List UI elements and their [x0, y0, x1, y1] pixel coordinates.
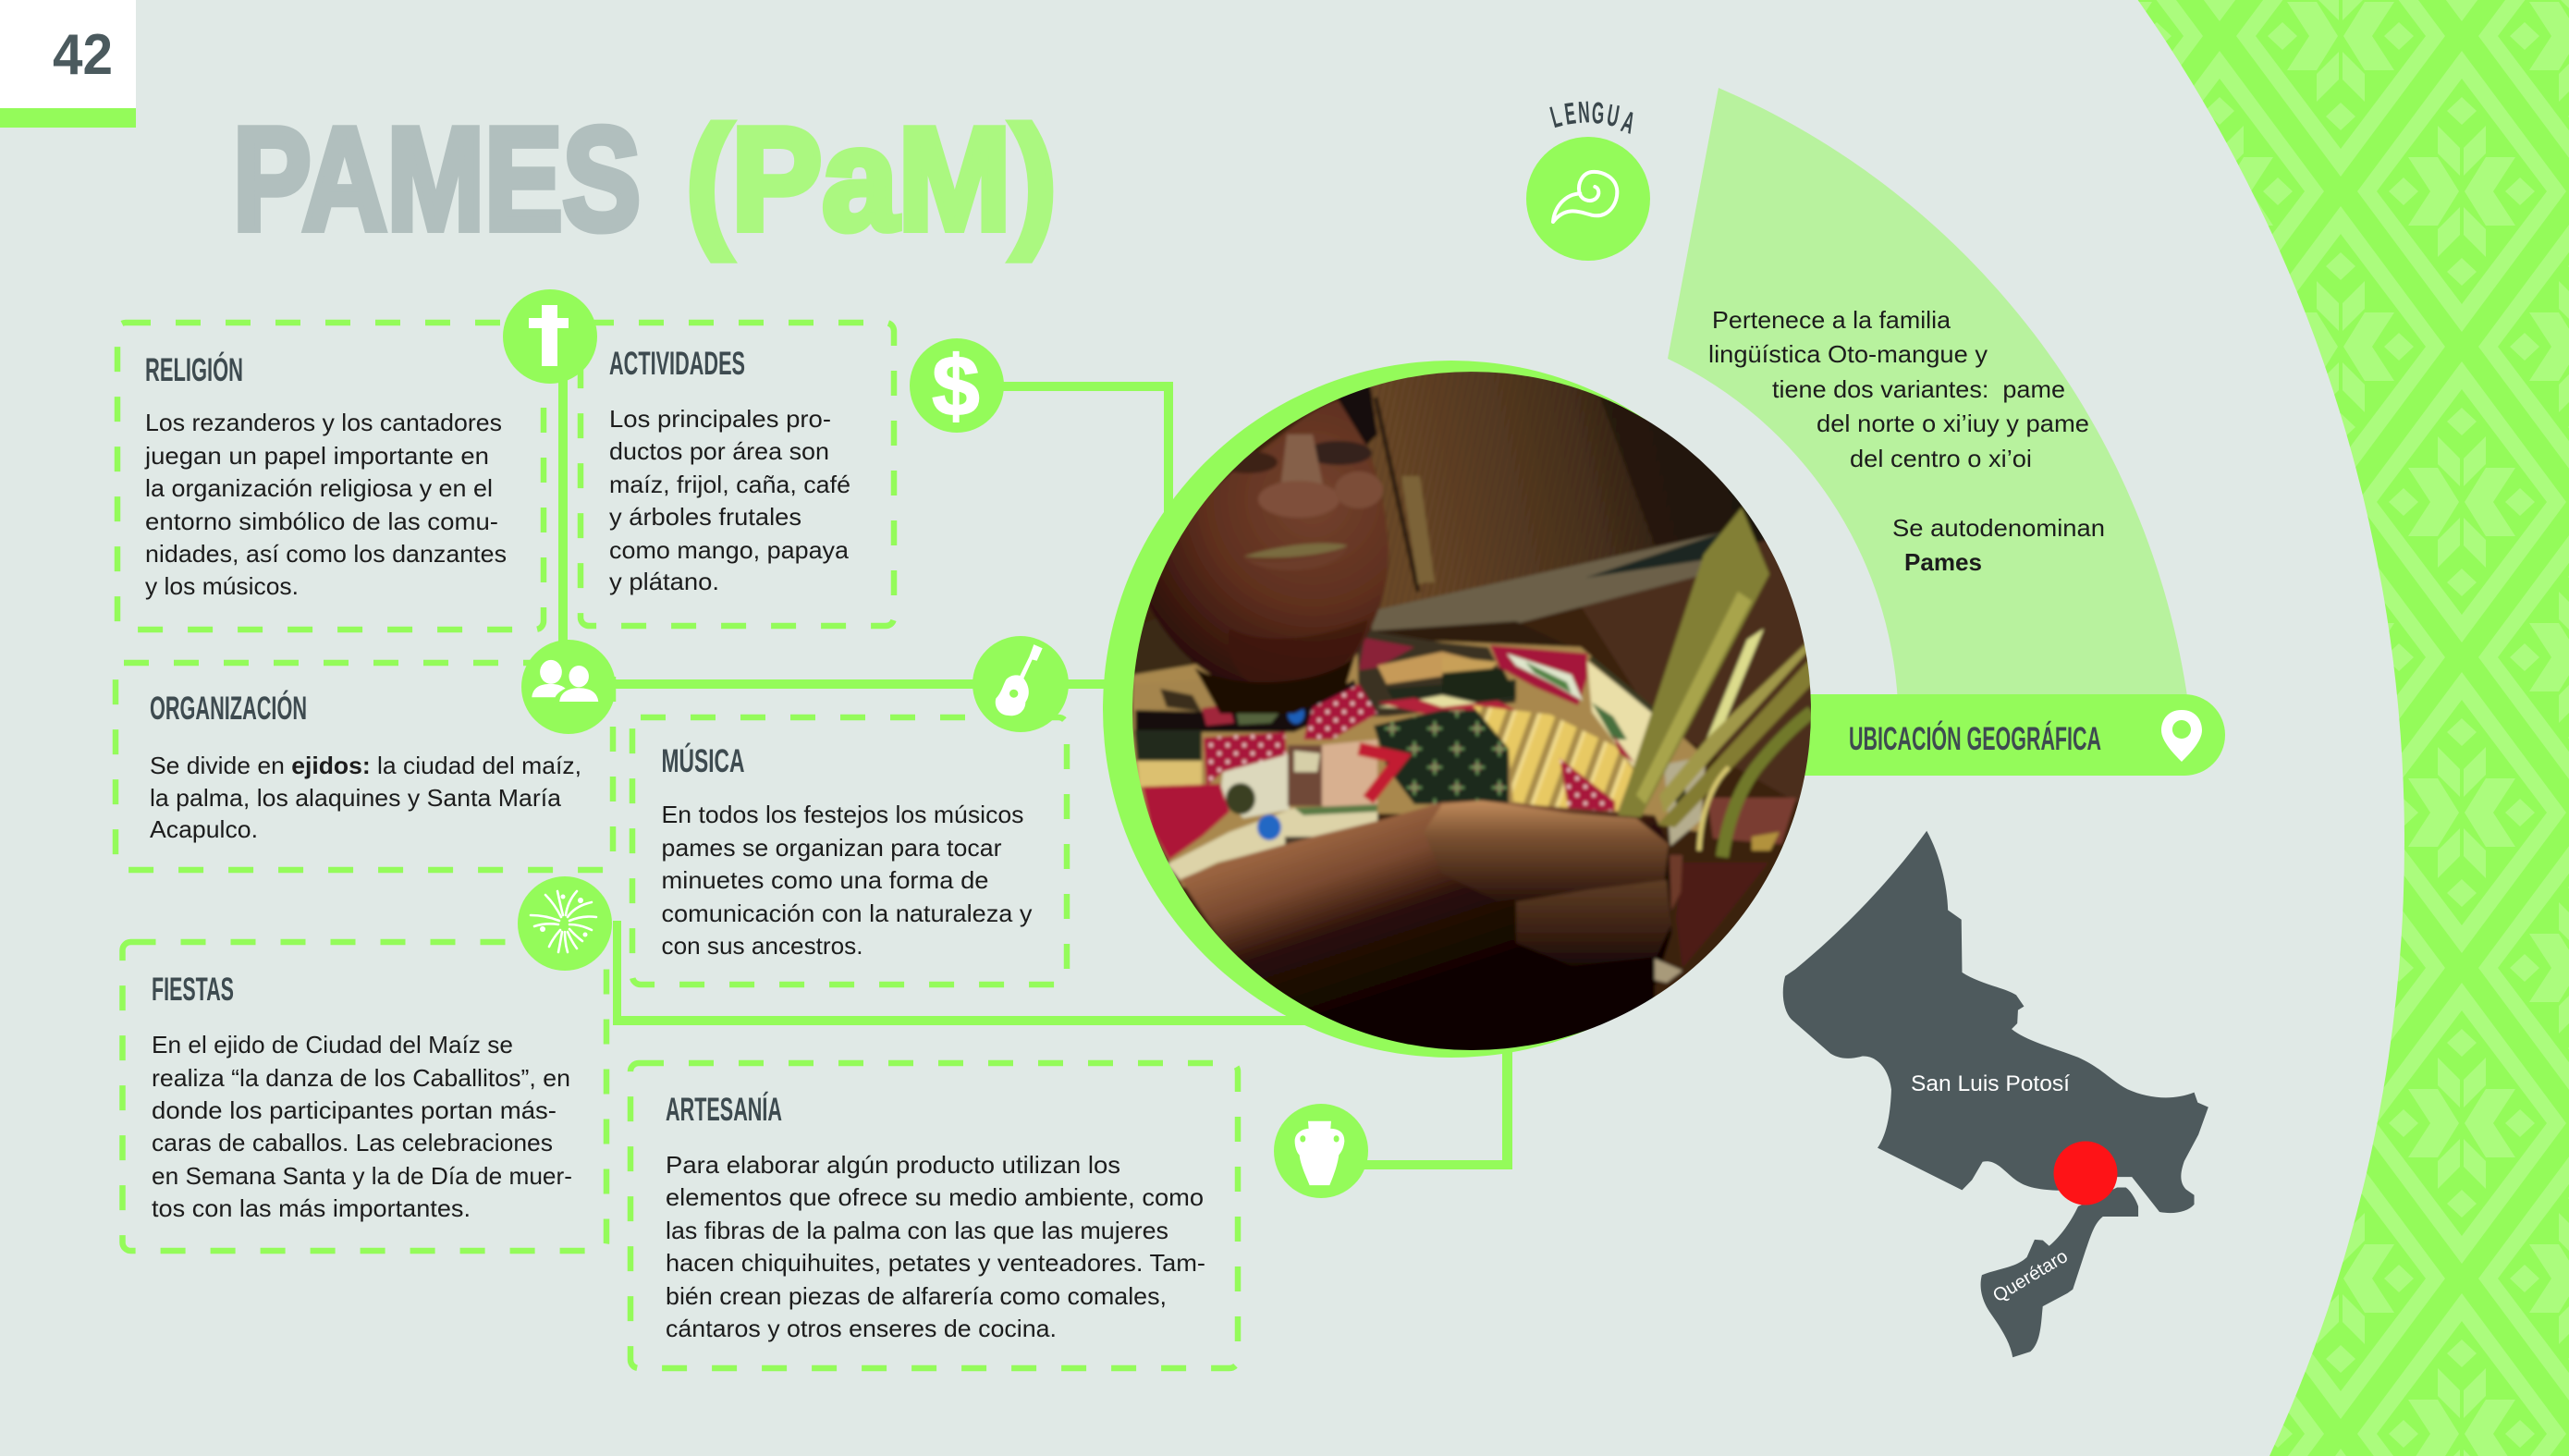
page number tab: [0, 0, 136, 128]
panel: religión: nidades, así como los danzantes: [145, 540, 507, 568]
photo ring: [1103, 361, 1800, 1058]
map region: Querétaro: [1981, 1188, 2138, 1357]
palm leaves: [1618, 508, 1769, 817]
title: [233, 98, 1057, 261]
collar and neck: [1150, 682, 1213, 716]
icon: people: [521, 640, 616, 734]
map: San Luis Potosí y Querétaro: San Luis Potosí: [1911, 1071, 2070, 1096]
panel: religión: entorno simbólico de las comu-: [145, 508, 498, 535]
left panels: [1134, 730, 1202, 761]
panel: música: con sus ancestros.: [662, 932, 863, 960]
map: San Luis Potosí y Querétaro: Querétaro: [1989, 1246, 2072, 1306]
panel: fiestas: FIESTAS: [152, 972, 234, 1008]
heading: lengua: A: [1618, 104, 1639, 141]
panel: música: minuetes como una forma de: [662, 866, 989, 894]
panel: religión: la organización religiosa y en el: [145, 474, 493, 502]
panel: religión: y los músicos.: [145, 572, 299, 600]
pill: ubicación geográfica: [1756, 694, 2225, 776]
photo: woman weaving palm: [1128, 370, 1817, 1054]
panel: religión: juegan un papel importante en: [144, 442, 489, 470]
connector lines: [558, 370, 1512, 1169]
panel: actividades: ACTIVIDADES: [609, 346, 745, 382]
panel: música: pames se organizan para tocar: [662, 834, 1002, 862]
panel: organización: ORGANIZACIÓN: [150, 690, 307, 727]
panel: actividades: y plátano.: [609, 568, 719, 595]
woven pattern band: [2098, 0, 2569, 1456]
panel: fiestas: en Semana Santa y la de Día de muer-: [152, 1162, 572, 1190]
pill: ubicación geográfica: UBICACIÓN GEOGRÁFICA: [1849, 720, 2101, 757]
panel: lengua arc background: [1668, 88, 2188, 703]
panel: música: MÚSICA: [662, 742, 745, 779]
wood wall: [1365, 372, 1765, 610]
panel: fiestas: [122, 942, 606, 1251]
map region: San Luis Potosí: [1783, 831, 2208, 1213]
panel: religión: [117, 323, 544, 630]
text block: lengua: Pames: [1904, 548, 1982, 576]
heading: lengua: N: [1577, 94, 1591, 129]
title: PAMES: [233, 98, 641, 261]
icon: location pin: [2161, 710, 2202, 762]
text block: lengua: del norte o xi’iuy y pame: [1817, 410, 2089, 437]
panel: artesanía: elementos que ofrece su medio ambiente, como: [666, 1183, 1204, 1211]
icon: vase: [1274, 1104, 1368, 1198]
panel: religión: RELIGIÓN: [145, 351, 243, 388]
panel: fiestas: caras de caballos. Las celebraciones: [152, 1129, 553, 1156]
panel: actividades: maíz, frijol, caña, café: [609, 471, 850, 498]
icon: lengua circle: [1526, 137, 1650, 261]
heading: lengua: [1547, 94, 1639, 141]
upper shirt patches: [1357, 629, 1516, 716]
map: San Luis Potosí y Querétaro: [1783, 831, 2208, 1357]
panel: actividades: y árboles frutales: [609, 503, 801, 531]
panel: artesanía: hacen chiquihuites, petates y venteadores. Tam-: [666, 1249, 1205, 1277]
panel: fiestas: tos con las más importantes.: [152, 1194, 471, 1222]
title: (PaM): [686, 98, 1057, 261]
text block: lengua: Pertenece a la familia: [1712, 306, 1951, 334]
page number tab: 42: [53, 23, 113, 87]
heading: lengua: U: [1605, 97, 1621, 133]
panel: música: [632, 717, 1067, 985]
panel: artesanía: ARTESANÍA: [666, 1091, 782, 1128]
panel: organización: Se divide en ejidos: la ciudad del maíz,: [150, 752, 581, 779]
text block: lengua: [1708, 306, 2105, 576]
yellow band and red triangle: [1473, 705, 1633, 811]
text block: lengua: tiene dos variantes: pame: [1772, 375, 2065, 403]
plank: [1371, 532, 1722, 630]
panel: fiestas: donde los participantes portan más-: [152, 1096, 557, 1124]
icon: guitar: [973, 636, 1069, 732]
panel: fiestas: realiza “la danza de los Caballitos”, en: [152, 1064, 570, 1092]
panel: artesanía: bién crean piezas de alfarería como comales,: [666, 1282, 1167, 1310]
top shirt folds: [1474, 656, 1499, 673]
panel: artesanía: cántaros y otros enseres de cocina.: [666, 1315, 1057, 1342]
right hand fingers: [1707, 798, 1796, 844]
panel: organización: la palma, los alaquines y Santa María: [150, 784, 562, 812]
star and green block: [1374, 710, 1509, 804]
panel: actividades: Los principales pro-: [609, 405, 831, 433]
neck: [1194, 658, 1354, 714]
heading: lengua: L: [1547, 99, 1565, 135]
text block: lengua: Se autodenominan: [1892, 514, 2105, 542]
knuckles: [1424, 801, 1669, 901]
marker: red location dot: [2054, 1141, 2117, 1205]
panel: artesanía: las fibras de la palma con las que las mujeres: [666, 1217, 1168, 1244]
icon: cross: [503, 289, 597, 384]
panel: actividades: [581, 323, 894, 626]
text block: lengua: del centro o xi’oi: [1850, 445, 2032, 472]
forearm: [1181, 801, 1671, 1054]
panel: fiestas: En el ejido de Ciudad del Maíz se: [152, 1031, 513, 1058]
panel: religión: Los rezanderos y los cantadores: [145, 409, 502, 436]
heading: lengua: G: [1591, 95, 1605, 130]
shirt base: [1132, 638, 1706, 887]
panel: artesanía: Para elaborar algún producto utilizan los: [666, 1151, 1120, 1179]
icon: dollar: $: [932, 339, 980, 434]
panel: música: En todos los festejos los músicos: [662, 801, 1024, 828]
heading: lengua: E: [1562, 95, 1578, 131]
panel: artesanía: [630, 1063, 1238, 1368]
panel: actividades: como mango, papaya: [609, 536, 850, 564]
icon: dollar: [910, 338, 1004, 434]
panel: actividades: ductos por área son: [609, 437, 829, 465]
panel: música: comunicación con la naturaleza y: [662, 899, 1032, 927]
panel: organización: [116, 663, 613, 870]
text block: lengua: lingüística Oto-mangue y: [1708, 340, 1988, 368]
icon: fireworks: [518, 876, 612, 971]
panel: organización: Acapulco.: [150, 815, 258, 843]
face: [1146, 399, 1388, 691]
